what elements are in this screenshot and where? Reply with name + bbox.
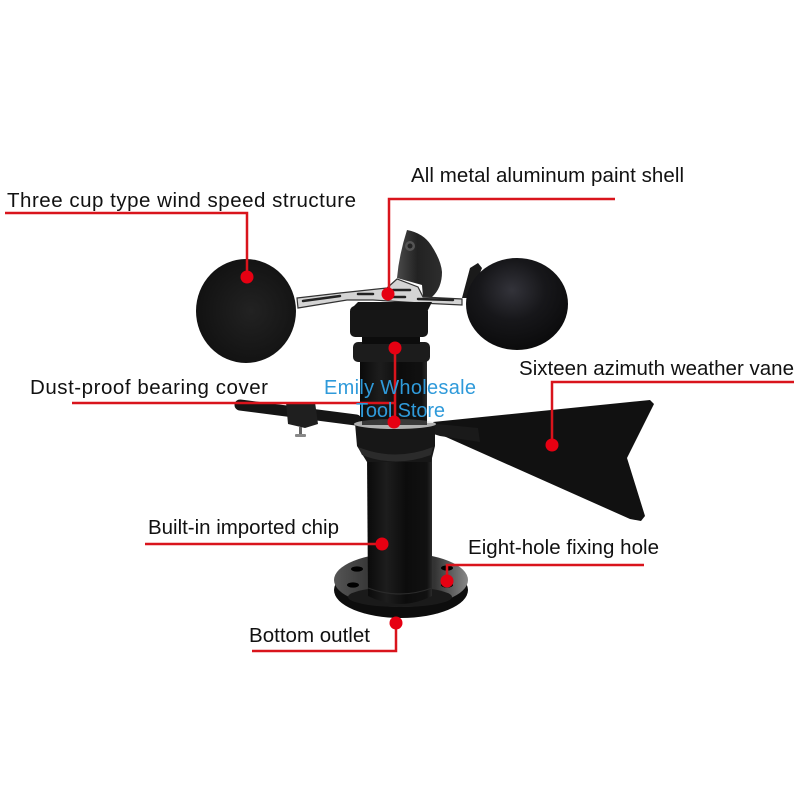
marker	[440, 574, 454, 588]
watermark: store name: Tool Store	[356, 400, 445, 422]
marker	[382, 288, 394, 300]
label: Built-in imported chip	[148, 516, 339, 539]
leader line	[447, 565, 644, 581]
watermark: store name	[324, 377, 476, 422]
callout: weather vane	[519, 357, 794, 452]
left cup	[196, 259, 296, 363]
callout: imported chip	[145, 516, 388, 550]
callout: aluminum shell	[382, 164, 684, 300]
label: All metal aluminum paint shell	[411, 164, 684, 187]
right cup	[462, 258, 568, 350]
leader line	[5, 213, 247, 277]
mounting base	[334, 553, 468, 618]
product: anemometer with wind vane	[196, 230, 654, 618]
callout: bottom outlet	[249, 616, 402, 651]
callout: bearing cover	[30, 342, 402, 428]
marker	[546, 438, 558, 452]
mast body	[350, 306, 436, 604]
rotor arm	[297, 279, 462, 310]
marker: lower	[388, 416, 400, 428]
top cup	[397, 230, 442, 297]
label: Sixteen azimuth weather vane	[519, 357, 794, 380]
callout: fixing hole	[440, 536, 659, 588]
leader line	[389, 199, 615, 294]
marker	[240, 270, 254, 284]
watermark: store name: Emily Wholesale	[324, 377, 476, 399]
leader line	[552, 382, 794, 445]
weather vane fin	[427, 400, 654, 521]
label: Dust-proof bearing cover	[30, 376, 268, 399]
counterweight rod	[240, 402, 356, 437]
leader line	[252, 623, 396, 651]
marker	[376, 538, 388, 550]
label: Three cup type wind speed structure	[7, 189, 356, 212]
label: Eight-hole fixing hole	[468, 536, 659, 559]
leader line	[72, 348, 395, 422]
label: Bottom outlet	[249, 624, 370, 647]
marker	[390, 616, 402, 630]
leader line	[145, 543, 382, 545]
marker: upper	[388, 342, 402, 354]
callout: three cup structure	[5, 189, 356, 284]
